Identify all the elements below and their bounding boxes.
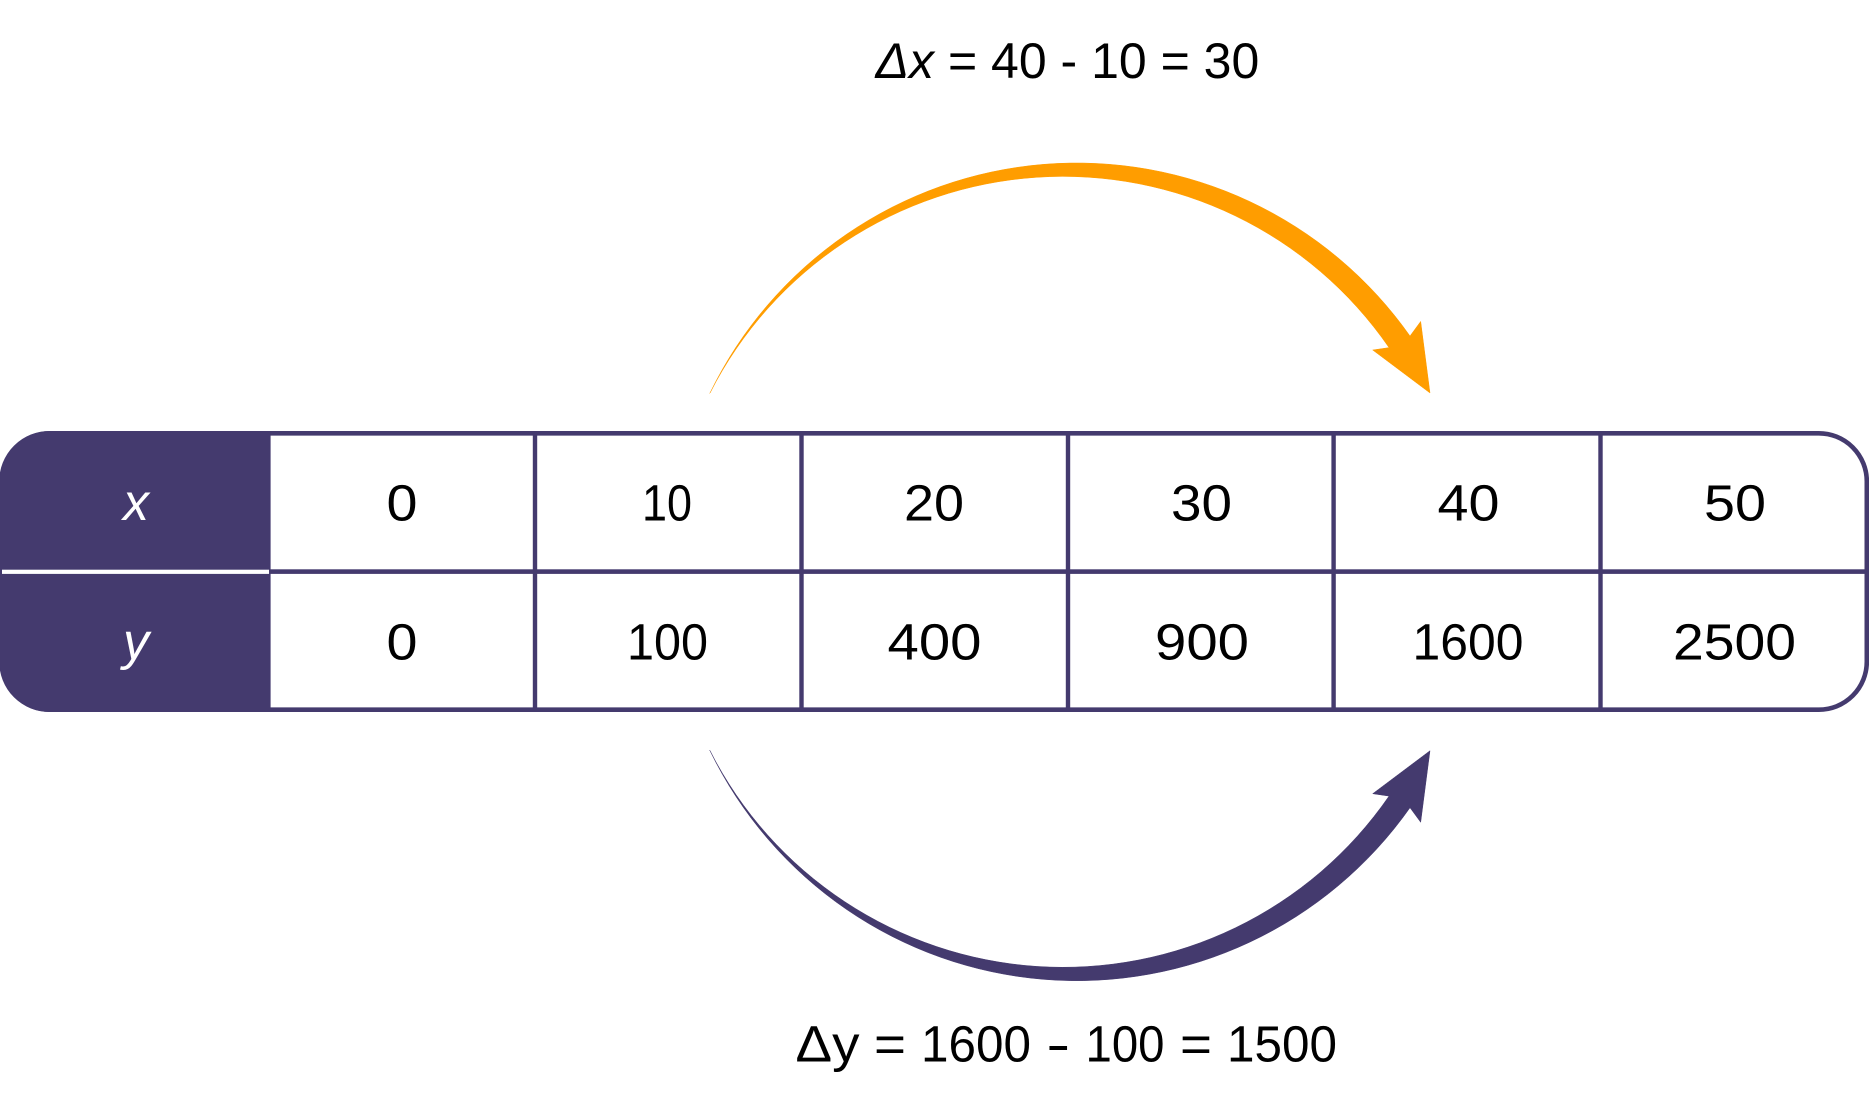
heading: delta y calculation: Δy	[796, 1016, 860, 1072]
x row values: 20	[904, 474, 964, 532]
x row values: 0	[386, 474, 418, 532]
heading: delta y calculation: =	[874, 1016, 906, 1072]
table: x and y values	[0, 431, 1867, 712]
heading: delta y calculation: 1600	[921, 1016, 1031, 1072]
header divider	[2, 570, 269, 574]
row label: y: y	[120, 613, 152, 671]
y row values	[386, 614, 1796, 670]
heading: delta x calculation: Δx = 40 - 10 = 30	[874, 33, 1259, 89]
row divider	[270, 569, 1867, 574]
y row values: 900	[1155, 614, 1249, 670]
x row values: 30	[1171, 474, 1232, 532]
heading: delta y calculation: -	[1046, 1016, 1070, 1072]
row header panel	[0, 431, 271, 712]
y row values: 100	[627, 614, 708, 670]
y row values: 2500	[1673, 614, 1796, 670]
y row values: 1600	[1412, 614, 1524, 670]
column dividers	[533, 433, 1603, 710]
heading: delta y calculation: =	[1180, 1016, 1212, 1072]
arrow: purple curved arrow from 100 to 1600	[710, 750, 1430, 981]
x row values: 10	[642, 474, 692, 532]
heading: delta y calculation: 1500	[1227, 1016, 1337, 1072]
x row values: 40	[1438, 474, 1500, 532]
y row values: 400	[888, 614, 982, 670]
x row values	[386, 474, 1766, 532]
heading: delta y calculation: 100	[1086, 1016, 1164, 1072]
arrow: orange curved arrow from 10 to 40	[710, 163, 1430, 394]
y row values: 0	[386, 614, 418, 670]
table frame	[2, 433, 1867, 710]
heading: delta y calculation	[796, 1016, 1337, 1072]
x row values: 50	[1704, 474, 1766, 532]
row label: x: x	[120, 474, 151, 532]
